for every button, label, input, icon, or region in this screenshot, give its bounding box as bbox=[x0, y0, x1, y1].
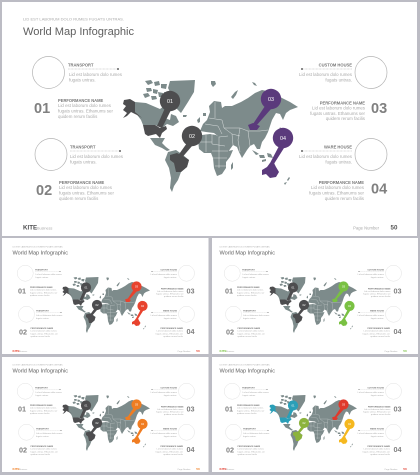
thumbnail slide: red: TRANSPORT bbox=[36, 309, 49, 312]
block: performance 03 bbox=[310, 100, 387, 121]
thumbnail slide: green: 02 bbox=[226, 328, 234, 336]
thumbnail slide: multicolour: 03 bbox=[342, 402, 345, 406]
thumbnail slide: orange: Lid est laborum dolo rumes bbox=[151, 391, 178, 394]
thumbnail slide: red: fugats untras. Ethanums ser bbox=[30, 291, 58, 294]
thumbnail slide: green: WARE HOUSE bbox=[370, 309, 385, 312]
thumbnail slide: orange: fugats untras. bbox=[164, 394, 177, 397]
thumbnail slide: green: Lid est laborum dolo rumes bbox=[358, 314, 385, 317]
thumbnail slide: multicolour: fugats untras. Ethanums ser bbox=[363, 450, 390, 453]
thumbnail slide: green: PERFORMANCE NAME bbox=[238, 327, 261, 330]
block: performance 01: fugats untras. Ethanums ser bbox=[58, 108, 113, 114]
thumbnail slide: green: fugats untras. Ethanums ser bbox=[363, 332, 390, 335]
block: transport 2: Lid est laborum dolo rumes bbox=[70, 154, 124, 159]
thumbnail slide: orange bbox=[2, 357, 208, 472]
main slide bbox=[2, 2, 417, 236]
thumbnail slide: green: Lid est laborum dolo rumes bbox=[358, 273, 385, 276]
thumbnail slide: red: 03 bbox=[186, 286, 195, 296]
thumbnail slide: orange: quidem rerum facilis bbox=[30, 453, 51, 456]
thumbnail slide: green: fugats untras. bbox=[371, 276, 384, 279]
thumbnail slide: orange: PERFORMANCE NAME bbox=[30, 404, 53, 407]
thumbnail slide: orange: 02 bbox=[19, 446, 27, 454]
block: performance 04: quidem rerum facilis bbox=[325, 196, 365, 201]
thumbnail slide: green: fugats untras. Ethanums ser bbox=[363, 292, 391, 296]
thumbnail slide: orange: Lid est laborum dolo rumes bbox=[36, 391, 63, 394]
thumbnail slide: red: fugats untras. bbox=[36, 276, 49, 279]
pin labels: 02 bbox=[189, 134, 195, 140]
thumbnail slide: red: 50 bbox=[196, 349, 200, 353]
thumbnail slide: red: 02 bbox=[96, 303, 99, 307]
thumbnail slide: multicolour: quidem rerum facilis bbox=[238, 453, 258, 456]
block: performance 02: quidem rerum facilis bbox=[59, 196, 99, 201]
thumbnail slide: multicolour: PERFORMANCE NAME bbox=[368, 405, 391, 408]
thumbnail slide: multicolour: 01 bbox=[292, 404, 295, 408]
footer logo: Business bbox=[37, 226, 53, 230]
block: performance 02: 02 bbox=[36, 183, 52, 199]
footer logo bbox=[23, 224, 53, 232]
thumbnail slide: multicolour: Page Number bbox=[385, 468, 398, 471]
block: transport 1: Lid est laborum dolo rumes bbox=[69, 72, 123, 77]
page number bbox=[353, 224, 398, 232]
block: ware house: WARE HOUSE bbox=[324, 144, 352, 150]
thumbnail slide: red: 03 bbox=[135, 284, 138, 288]
thumbnail slide: multicolour: Lid est laborum dolo rumes bbox=[237, 406, 264, 410]
block: performance 01 bbox=[34, 98, 113, 119]
thumbnail slide: red: Lid est laborum dolo rumes bbox=[30, 330, 58, 332]
thumbnail slide: orange: KITE bbox=[12, 467, 20, 471]
block: performance 01: quidem rerum facilis bbox=[58, 114, 98, 119]
thumbnail slide: red: 01 bbox=[18, 286, 26, 296]
thumbnail slide: red: TRANSPORT bbox=[35, 268, 48, 271]
thumbnail slide: orange: TRANSPORT bbox=[36, 427, 49, 430]
block: performance 03: fugats untras. Ethanums ser bbox=[310, 111, 366, 116]
thumbnail slide: orange: fugats untras. bbox=[36, 394, 49, 397]
thumbnail slide: green: 04 bbox=[394, 327, 402, 336]
thumbnail slide: green: Lid est laborum dolo rumes bbox=[242, 273, 270, 276]
thumbnail slide: green: 03 bbox=[342, 284, 345, 288]
thumbnail slide: green: quidem rerum facilis bbox=[237, 294, 257, 297]
thumbnail slide: red: PERFORMANCE NAME bbox=[30, 327, 54, 330]
thumbnail slide: orange: fugats untras. bbox=[164, 435, 177, 438]
thumbnail slide: orange: World Map Infographic bbox=[12, 368, 68, 374]
pin labels: 03 bbox=[268, 97, 274, 103]
thumbnail slide: green: CUSTOM HOUSE bbox=[367, 269, 385, 271]
thumbnail slide: orange: LID EST LABORUM DOLO RUMES FUGATS UNTRAS. bbox=[12, 363, 63, 366]
thumbnail slide: red: fugats untras. Ethanums ser bbox=[156, 292, 184, 296]
thumbnail slide: green: PERFORMANCE NAME bbox=[237, 286, 260, 289]
block: ware house bbox=[299, 138, 387, 170]
thumbnail slide: multicolour: fugats untras. Ethanums ser bbox=[237, 409, 265, 412]
block: performance 02: PERFORMANCE NAME bbox=[59, 180, 105, 185]
thumbnail slide: multicolour: fugats untras. bbox=[242, 394, 256, 397]
block: performance 04: PERFORMANCE NAME bbox=[319, 180, 364, 185]
thumbnail slide: green: 01 bbox=[292, 286, 295, 290]
thumbnail slide: multicolour: quidem rerum facilis bbox=[370, 453, 391, 456]
thumbnail slide: green: Lid est laborum dolo rumes bbox=[364, 290, 391, 293]
thumbnail slide: red: KITE bbox=[12, 349, 20, 353]
thumbnail slide: red: fugats untras. bbox=[164, 276, 177, 279]
thumbnail slide: green: World Map Infographic bbox=[220, 250, 275, 256]
thumbnail slide: multicolour: 04 bbox=[348, 422, 351, 426]
thumbnail slide: red: quidem rerum facilis bbox=[30, 294, 50, 297]
block: performance 04: 04 bbox=[371, 182, 387, 198]
block: transport 2: TRANSPORT bbox=[70, 144, 96, 150]
thumbnail slide: multicolour: 50 bbox=[403, 467, 407, 471]
thumbnail slide: orange: PERFORMANCE NAME bbox=[160, 445, 184, 448]
block: custom house bbox=[299, 56, 387, 88]
thumbnail slide: orange: 04 bbox=[186, 445, 195, 454]
page number: Page Number bbox=[353, 226, 380, 230]
thumbnail slide: red: Business bbox=[20, 351, 27, 353]
thumbnail slide: multicolour: Lid est laborum dolo rumes bbox=[243, 432, 270, 435]
block: performance 01: PERFORMANCE NAME bbox=[58, 98, 104, 103]
thumbnail slide: red: PERFORMANCE NAME bbox=[161, 287, 184, 290]
thumbnail slide: red: Lid est laborum dolo rumes bbox=[30, 288, 57, 292]
block: transport 1: TRANSPORT bbox=[68, 62, 94, 68]
thumbnail slide: green: fugats untras. bbox=[371, 317, 384, 320]
thumbnail slide: multicolour: 02 bbox=[302, 421, 306, 425]
thumbnail slide: orange: Lid est laborum dolo rumes bbox=[157, 408, 184, 411]
thumbnail slide: multicolour: fugats untras. bbox=[371, 394, 384, 397]
block: ware house: Lid est laborum dolo rumes bbox=[299, 154, 353, 159]
thumbnail slide: green: Lid est laborum dolo rumes bbox=[237, 288, 264, 292]
thumbnail slide: multicolour: Lid est laborum dolo rumes bbox=[358, 432, 385, 435]
thumbnail slide: orange: Business bbox=[20, 469, 27, 471]
footer logo: KITE bbox=[23, 224, 37, 232]
thumbnail slide: multicolour: fugats untras. bbox=[371, 435, 384, 438]
thumbnail slide: orange: fugats untras. Ethanums ser bbox=[30, 450, 58, 453]
thumbnail slide: orange: fugats untras. Ethanums ser bbox=[30, 409, 58, 412]
thumbnail slide: green: TRANSPORT bbox=[242, 268, 255, 271]
thumbnail slide: orange: WARE HOUSE bbox=[163, 427, 178, 430]
thumbnail slide: green: 04 bbox=[348, 304, 351, 308]
block: performance 02 bbox=[36, 180, 114, 201]
thumbnail slide: multicolour: KITE bbox=[220, 467, 227, 471]
thumbnail slide: orange: Lid est laborum dolo rumes bbox=[157, 448, 184, 450]
thumbnail slide: green: fugats untras. bbox=[242, 276, 256, 279]
thumbnail slide: green: Lid est laborum dolo rumes bbox=[243, 314, 270, 317]
thumbnail slide: green: Page Number bbox=[385, 350, 398, 353]
thumbnail slide: multicolour: Lid est laborum dolo rumes bbox=[238, 448, 265, 450]
block: performance 01: 01 bbox=[34, 101, 50, 117]
thumbnail slide: orange: PERFORMANCE NAME bbox=[161, 405, 184, 408]
thumbnail slide: green: fugats untras. Ethanums ser bbox=[237, 291, 265, 294]
thumbnail slide: orange: Page Number bbox=[178, 468, 191, 471]
thumbnail slide: multicolour: 01 bbox=[225, 404, 233, 414]
thumbnail slide: multicolour: 02 bbox=[226, 446, 234, 454]
thumbnail slide: green bbox=[212, 238, 418, 354]
thumbnail slide: red: fugats untras. Ethanums ser bbox=[30, 332, 58, 335]
thumbnail slide: green: Business bbox=[226, 351, 234, 353]
thumbnail slide: green: PERFORMANCE NAME bbox=[367, 327, 391, 330]
thumbnail slide: red: fugats untras. bbox=[36, 317, 50, 320]
thumbnail slide: multicolour: fugats untras. Ethanums ser bbox=[363, 410, 391, 414]
thumbnail slide: green: quidem rerum facilis bbox=[371, 295, 391, 298]
thumbnail slide: red: Lid est laborum dolo rumes bbox=[157, 290, 184, 293]
block: performance 04: fugats untras. Ethanums ser bbox=[309, 190, 365, 196]
pin labels: 04 bbox=[280, 136, 286, 142]
thumbnail slide: red: LID EST LABORUM DOLO RUMES FUGATS UNTRAS. bbox=[12, 245, 63, 248]
thumbnail slide: red: WARE HOUSE bbox=[163, 309, 178, 312]
thumbnail slide: multicolour: PERFORMANCE NAME bbox=[237, 404, 260, 407]
block: performance 03: Lid est laborum dolo rumes bbox=[312, 106, 366, 110]
thumbnail slide: red: PERFORMANCE NAME bbox=[30, 286, 53, 289]
thumbnail slide: red: Lid est laborum dolo rumes bbox=[36, 273, 63, 276]
block: custom house: fugats untras. bbox=[325, 78, 352, 82]
thumbnail slide: red: Lid est laborum dolo rumes bbox=[151, 314, 178, 317]
thumbnail slide: orange: 50 bbox=[196, 467, 200, 471]
thumbnail slide: multicolour: Lid est laborum dolo rumes bbox=[364, 408, 391, 411]
thumbnail slide: orange: fugats untras. bbox=[36, 435, 50, 438]
thumbnail slide: green: fugats untras. bbox=[243, 317, 257, 320]
thumbnail slide: green: 02 bbox=[302, 303, 306, 307]
thumbnail slide: orange: fugats untras. Ethanums ser bbox=[156, 410, 184, 414]
thumbnail slide: orange: CUSTOM HOUSE bbox=[160, 387, 178, 389]
thumbnail slide: orange: PERFORMANCE NAME bbox=[30, 445, 54, 448]
block: custom house: Lid est laborum dolo rumes bbox=[299, 72, 353, 77]
thumbnail slide: green: KITE bbox=[220, 349, 227, 353]
block: performance 01: Lid est laborum dolo rumes bbox=[58, 103, 112, 108]
block: performance 03: 03 bbox=[371, 101, 387, 117]
thumbnail slide: red: fugats untras. bbox=[164, 317, 177, 320]
thumbnail slide: red: 04 bbox=[186, 327, 195, 336]
thumbnail slide: green: fugats untras. Ethanums ser bbox=[238, 332, 265, 335]
thumbnail slide: red bbox=[2, 238, 208, 354]
pin labels: 01 bbox=[167, 99, 173, 105]
thumbnail slide: orange: TRANSPORT bbox=[35, 386, 48, 389]
thumbnail slide: multicolour: quidem rerum facilis bbox=[237, 412, 257, 415]
thumbnail slide: multicolour: 03 bbox=[394, 404, 402, 414]
world map bbox=[135, 80, 298, 192]
thumbnail slide: orange: Lid est laborum dolo rumes bbox=[30, 448, 58, 450]
thumbnail slide: red: 01 bbox=[84, 286, 88, 290]
block: ware house: fugats untras. bbox=[325, 160, 352, 164]
thumbnail slide: orange: quidem rerum facilis bbox=[164, 413, 184, 416]
thumbnail slide: red: World Map Infographic bbox=[12, 250, 68, 256]
thumbnail slide: multicolour: Lid est laborum dolo rumes bbox=[358, 391, 385, 394]
thumbnail slide: green: 01 bbox=[225, 286, 233, 296]
thumbnail slide: multicolour: TRANSPORT bbox=[242, 386, 255, 389]
thumbnail slide: multicolour: Lid est laborum dolo rumes bbox=[364, 448, 391, 450]
block: transport 1 bbox=[32, 56, 123, 88]
thumbnail slide: orange: 03 bbox=[135, 402, 138, 406]
block: transport 2: fugats untras. bbox=[70, 160, 97, 164]
thumbnail slide: green: 50 bbox=[403, 349, 407, 353]
thumbnail slide: multicolour: fugats untras. Ethanums ser bbox=[238, 450, 265, 453]
page number: 50 bbox=[390, 224, 398, 232]
block: custom house: CUSTOM HOUSE bbox=[319, 62, 352, 68]
thumbnail slide: orange: fugats untras. Ethanums ser bbox=[156, 450, 183, 453]
thumbnail slide: orange: 02 bbox=[96, 421, 99, 425]
thumbnail slide: green: quidem rerum facilis bbox=[370, 335, 391, 338]
block: performance 03: PERFORMANCE NAME bbox=[320, 100, 365, 106]
thumbnail slide: green: PERFORMANCE NAME bbox=[368, 287, 391, 290]
thumbnail slide: multicolour: fugats untras. bbox=[243, 435, 257, 438]
thumbnail slide: green: Lid est laborum dolo rumes bbox=[238, 330, 265, 332]
thumbnail slide: orange: quidem rerum facilis bbox=[30, 412, 50, 415]
thumbnail slide: red: quidem rerum facilis bbox=[164, 295, 184, 298]
thumbnail slide: orange: 01 bbox=[84, 404, 88, 408]
thumbnail slide: green: quidem rerum facilis bbox=[238, 335, 258, 338]
map highlights and pins bbox=[123, 89, 293, 178]
pin labels bbox=[167, 97, 286, 142]
thumbnail slide: multicolour: quidem rerum facilis bbox=[371, 413, 391, 416]
thumbnail slide: red: 04 bbox=[141, 304, 144, 308]
thumbnail slide: orange: 03 bbox=[186, 404, 195, 414]
thumbnail slide: green: Lid est laborum dolo rumes bbox=[364, 330, 391, 332]
thumbnail slide: red: Page Number bbox=[178, 350, 191, 353]
thumbnail slide: multicolour: PERFORMANCE NAME bbox=[367, 445, 391, 448]
thumbnail slide: red: 02 bbox=[19, 328, 27, 336]
thumbnail slide: green: 03 bbox=[394, 286, 402, 296]
thumbnail slide: multicolour: LID EST LABORUM DOLO RUMES FUGATS UNTRAS. bbox=[220, 363, 270, 366]
thumbnail slide: red: Lid est laborum dolo rumes bbox=[151, 273, 178, 276]
thumbnail slide: red: quidem rerum facilis bbox=[163, 335, 184, 338]
title: World Map Infographic bbox=[23, 26, 134, 38]
thumbnail slide: multicolour: TRANSPORT bbox=[243, 427, 256, 430]
thumbnail slide: red: CUSTOM HOUSE bbox=[160, 269, 178, 271]
block: performance 02: fugats untras. Ethanums ser bbox=[59, 190, 114, 196]
thumbnail slide: orange: Lid est laborum dolo rumes bbox=[30, 406, 57, 410]
thumbnail slide: red: Lid est laborum dolo rumes bbox=[157, 330, 184, 332]
thumbnail slide: green: TRANSPORT bbox=[243, 309, 256, 312]
block: performance 03: quidem rerum facilis bbox=[326, 116, 366, 121]
thumbnail slide: orange: 01 bbox=[18, 404, 26, 414]
thumbnail slide: red: fugats untras. Ethanums ser bbox=[156, 332, 183, 335]
thumbnail slide: multicolour bbox=[212, 357, 418, 472]
thumbnail slide: multicolour: 04 bbox=[394, 445, 402, 454]
thumbnail slide: multicolour: WARE HOUSE bbox=[370, 427, 385, 430]
block: performance 04 bbox=[309, 180, 387, 201]
thumbnail slide: orange: Lid est laborum dolo rumes bbox=[151, 432, 178, 435]
thumbnail slide: orange: Lid est laborum dolo rumes bbox=[36, 432, 63, 435]
block: performance 04: Lid est laborum dolo rumes bbox=[311, 185, 365, 190]
thumbnail slide: multicolour: Business bbox=[226, 469, 234, 471]
thumbnail slide: red: Lid est laborum dolo rumes bbox=[36, 314, 63, 317]
thumbnail slide: multicolour: CUSTOM HOUSE bbox=[367, 387, 385, 389]
thumbnail slide: green: LID EST LABORUM DOLO RUMES FUGATS UNTRAS. bbox=[220, 245, 270, 248]
block: transport 1: fugats untras. bbox=[69, 78, 96, 82]
thumbnail slide: orange: 04 bbox=[141, 422, 144, 426]
block: transport 2 bbox=[35, 138, 124, 170]
thumbnail slide: orange: quidem rerum facilis bbox=[163, 453, 184, 456]
thumbnail slide: multicolour: Lid est laborum dolo rumes bbox=[242, 391, 270, 394]
thumbnail slide: multicolour: PERFORMANCE NAME bbox=[238, 445, 261, 448]
thumbnail slide: red: PERFORMANCE NAME bbox=[160, 327, 184, 330]
block: performance 02: Lid est laborum dolo rumes bbox=[59, 185, 113, 190]
thumbnail slide: red: quidem rerum facilis bbox=[30, 335, 51, 338]
header caption: LID EST LABORUM DOLO RUMES FUGATS UNTRAS. bbox=[23, 16, 124, 22]
thumbnail slide: multicolour: World Map Infographic bbox=[220, 368, 275, 374]
